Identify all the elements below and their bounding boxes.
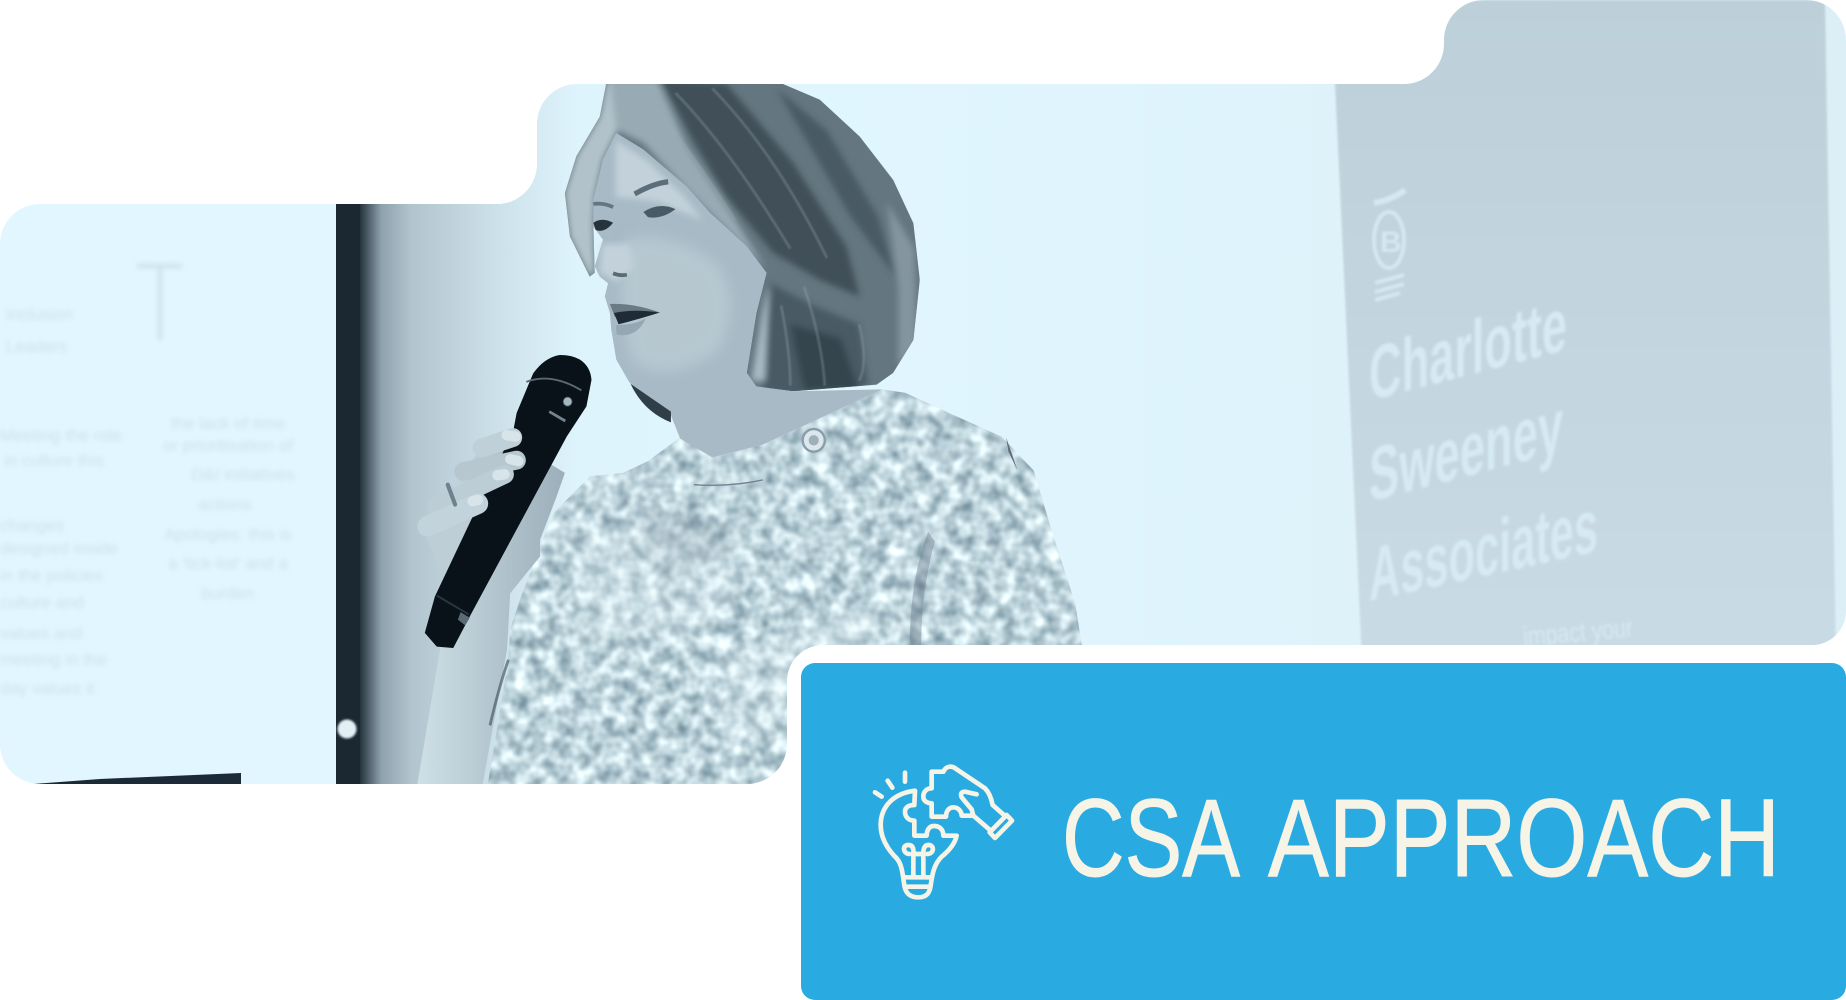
blouse	[483, 389, 1089, 815]
chin shadow	[631, 384, 671, 422]
blurred screen text: the lack of time	[171, 414, 285, 433]
blurred screen text: Meeting the role	[0, 426, 122, 445]
title: CSA APPROACH	[1062, 777, 1780, 900]
blurred screen text: Inclusion	[6, 305, 73, 324]
banner text: company name	[1370, 308, 1630, 644]
fingers	[428, 435, 518, 526]
blurred screen text	[0, 266, 294, 698]
blurred screen text: changes	[0, 516, 64, 535]
blurred screen text: Leaders	[6, 337, 67, 356]
banner text: company name: Charlotte	[1369, 282, 1567, 418]
blurred presentation screen	[0, 190, 336, 800]
projected banner	[1333, 0, 1836, 660]
banner logo	[1374, 190, 1405, 300]
hair	[556, 79, 933, 400]
banner logo: B	[1380, 226, 1402, 259]
blurred screen text: burden	[202, 584, 254, 603]
blue title panel	[801, 663, 1846, 1000]
blurred screen text: day values it	[0, 679, 95, 698]
title: CSA APPROACH: CSA	[1062, 777, 1240, 900]
blurred screen text: designed inside	[0, 539, 118, 558]
eyes and brows	[593, 220, 613, 231]
blurred screen text: Apologies: this is	[164, 525, 292, 544]
arm and hand	[417, 447, 565, 787]
face and neck	[593, 133, 882, 457]
blurred screen text: in culture this	[4, 451, 104, 470]
nose shadow	[613, 273, 627, 275]
microphone	[425, 355, 591, 648]
screen frame bar	[348, 204, 360, 784]
icon: lightbulb with puzzle piece and hand	[875, 767, 1012, 897]
banner text: company name: Associates	[1369, 483, 1598, 618]
blurred screen text: in the policies	[0, 566, 103, 585]
dark strip at screen base	[33, 773, 241, 784]
speaker figure	[417, 79, 1089, 815]
mouth	[610, 304, 660, 317]
blurred screen text: culture and	[0, 593, 84, 612]
banner text: company name: impact your	[1522, 613, 1634, 652]
blurred screen text: D&I initiatives	[192, 465, 294, 484]
frame white dot	[338, 720, 356, 738]
photo wall background	[336, 0, 1846, 800]
blurred screen text: or prioritisation of	[163, 436, 293, 455]
blurred screen text: meeting in the	[0, 650, 107, 669]
blurred screen text: values and	[0, 624, 82, 643]
blurred screen text: actions	[198, 495, 252, 514]
blurred screen text: a 'tick-list' and a	[168, 554, 288, 573]
banner text: company name: Sweeney	[1369, 383, 1563, 519]
